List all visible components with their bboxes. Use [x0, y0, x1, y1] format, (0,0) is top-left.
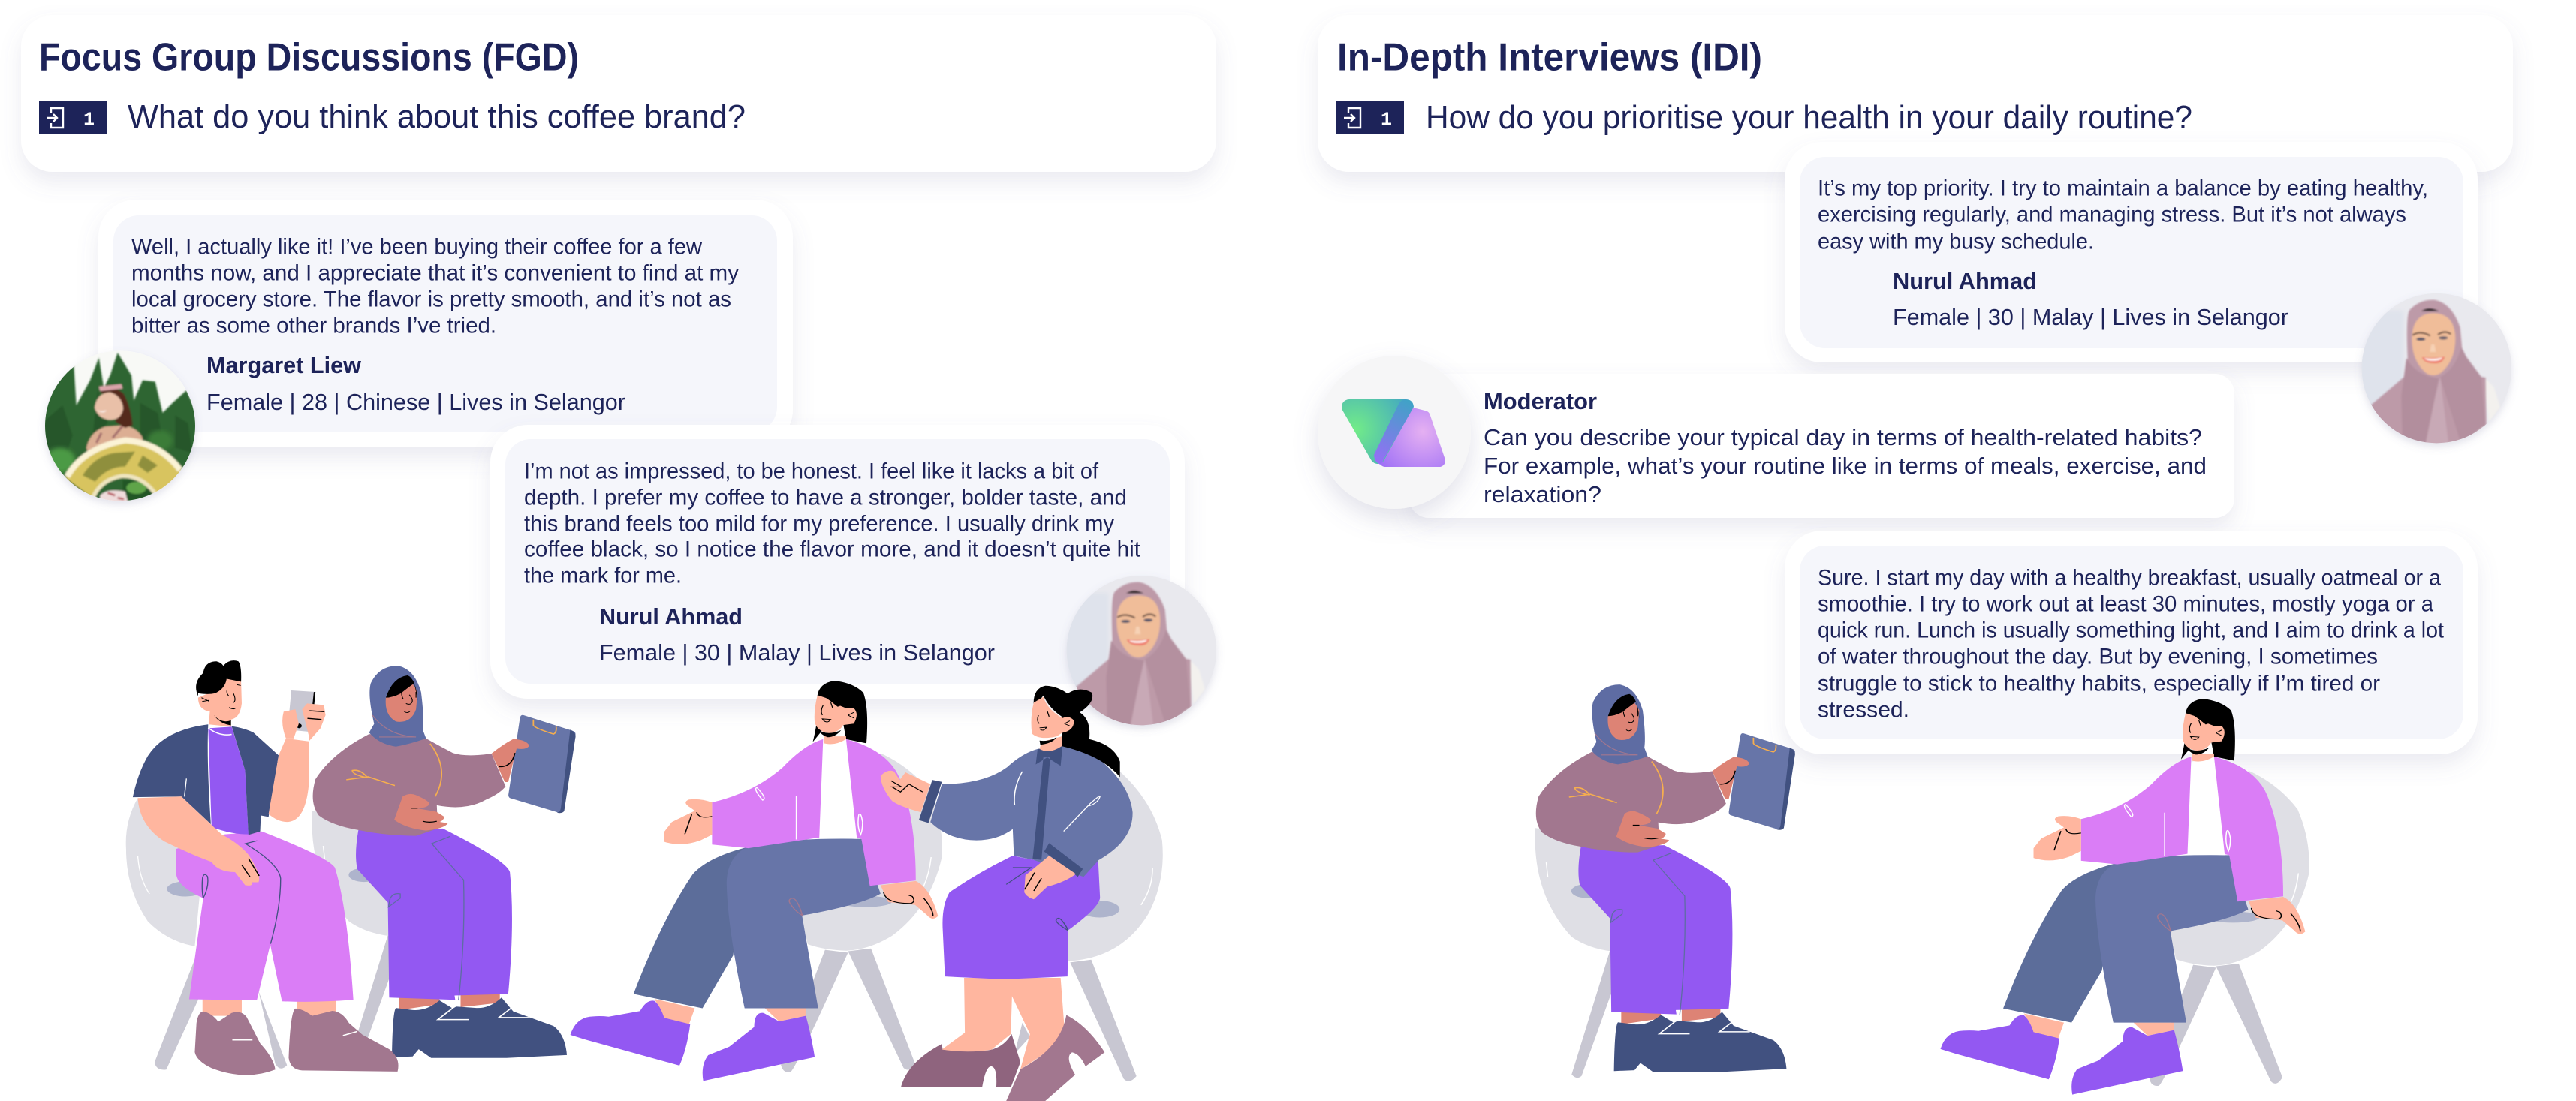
speech bubble: Nurul Ahmad on coffee: Female | 30 | Malay | Lives in Selangor [599, 639, 995, 666]
speech bubble: moderator: relaxation? [1484, 481, 1601, 507]
speech bubble: Margaret Liew: months now, and I appreciate that it’s convenient to find at my [131, 261, 739, 285]
speech bubble: daily routine answer: stressed. [1818, 698, 1909, 722]
badge: question 1 [39, 101, 107, 134]
question text: How do you prioritise your health in your daily routine? [1426, 99, 2192, 136]
avatar: Nurul Ahmad photo (IDI) [2359, 293, 2514, 448]
speech bubble: Nurul Ahmad on coffee: the mark for me. [524, 563, 682, 588]
question text: What do you think about this coffee brand? [128, 98, 746, 135]
speech bubble: Margaret Liew: Well, I actually like it! I’ve been buying their coffee for a few [131, 234, 702, 260]
speech bubble: daily routine answer: Sure. I start my day with a healthy breakfast, usually oatmeal or a [1818, 566, 2441, 590]
avatar: Nurul Ahmad photo [1064, 576, 1219, 730]
speech bubble: Margaret Liew [98, 200, 793, 447]
heading: IDI: In-Depth Interviews (IDI) [1337, 36, 1762, 80]
illustration: woman in skirt [881, 686, 1163, 1101]
speech bubble: Nurul Ahmad on coffee: Nurul Ahmad [599, 603, 743, 630]
speech bubble: Nurul Ahmad on coffee: depth. I prefer my coffee to have a stronger, bolder taste, and [524, 485, 1127, 510]
speech bubble: Margaret Liew: local grocery store. The flavor is pretty smooth, and it’s not as [131, 287, 731, 312]
badge: question 1: 1 [83, 109, 95, 131]
speech bubble: daily routine answer: of water throughout the day. But by evening, I sometimes [1818, 644, 2378, 669]
speech bubble: Nurul Ahmad on coffee [490, 425, 1185, 699]
speech bubble: Nurul Ahmad on health priority: Female | 30 | Malay | Lives in Selangor [1893, 304, 2288, 330]
speech bubble: moderator: Moderator [1484, 388, 1597, 414]
speech bubble: moderator [1409, 374, 2234, 518]
illustration: woman in pink jacket [571, 681, 942, 1081]
speech bubble: Nurul Ahmad on health priority: It’s my top priority. I try to maintain a balance by eating healthy, [1818, 176, 2428, 201]
illustration: man with phone [126, 660, 399, 1075]
badge: question 1 [1336, 101, 1404, 134]
speech bubble: Nurul Ahmad on coffee: this brand feels too mild for my preference. I usually drink my [524, 512, 1114, 536]
speech bubble: daily routine answer: smoothie. I try to work out at least 30 minutes, mostly yoga or a [1818, 591, 2433, 617]
logo shapes [1349, 399, 1439, 465]
speech bubble: Margaret Liew: Female | 28 | Chinese | Lives in Selangor [206, 389, 625, 415]
speech bubble: daily routine answer: quick run. Lunch is usually something light, and I aim to drink a lot [1818, 618, 2445, 642]
speech bubble: moderator: Can you describe your typical day in terms of health-related habits? [1484, 424, 2202, 450]
speech bubble: daily routine answer: struggle to stick to healthy habits, especially if I’m tired or [1818, 671, 2380, 696]
avatar: moderator logo [1318, 356, 1471, 509]
avatar: Margaret Liew photo [43, 347, 197, 505]
speech bubble: Nurul Ahmad on coffee: coffee black, so I notice the flavor more, and it doesn’t quite hit [524, 537, 1141, 561]
speech bubble: daily routine answer [1785, 531, 2478, 754]
speech bubble: Margaret Liew: Margaret Liew [206, 352, 362, 378]
illustration: IDI respondent in pink jacket [1941, 699, 2309, 1095]
heading: FGD: Focus Group Discussions (FGD) [39, 36, 579, 80]
illustration: IDI moderator in hijab [1535, 684, 1795, 1078]
speech bubble: Nurul Ahmad on health priority: exercising regularly, and managing stress. But it’s not always [1818, 203, 2406, 227]
panel: focus group discussions header [21, 15, 1216, 172]
speech bubble: Nurul Ahmad on health priority: Nurul Ahmad [1893, 268, 2037, 294]
panel: in-depth interviews header [1318, 15, 2513, 172]
speech bubble: Nurul Ahmad on coffee: I’m not as impressed, to be honest. I feel like it lacks a bit of [524, 459, 1099, 483]
illustration: moderator in hijab with clipboard [312, 666, 576, 1064]
badge: question 1: 1 [1381, 109, 1392, 131]
speech bubble: moderator: For example, what’s your routine like in terms of meals, exercise, and [1484, 453, 2207, 479]
illustration: FGD group of four [126, 660, 1163, 1101]
speech bubble: Margaret Liew: bitter as some other brands I’ve tried. [131, 314, 496, 338]
speech bubble: Nurul Ahmad on health priority [1785, 142, 2478, 362]
speech bubble: Nurul Ahmad on health priority: easy with my busy schedule. [1818, 230, 2094, 254]
